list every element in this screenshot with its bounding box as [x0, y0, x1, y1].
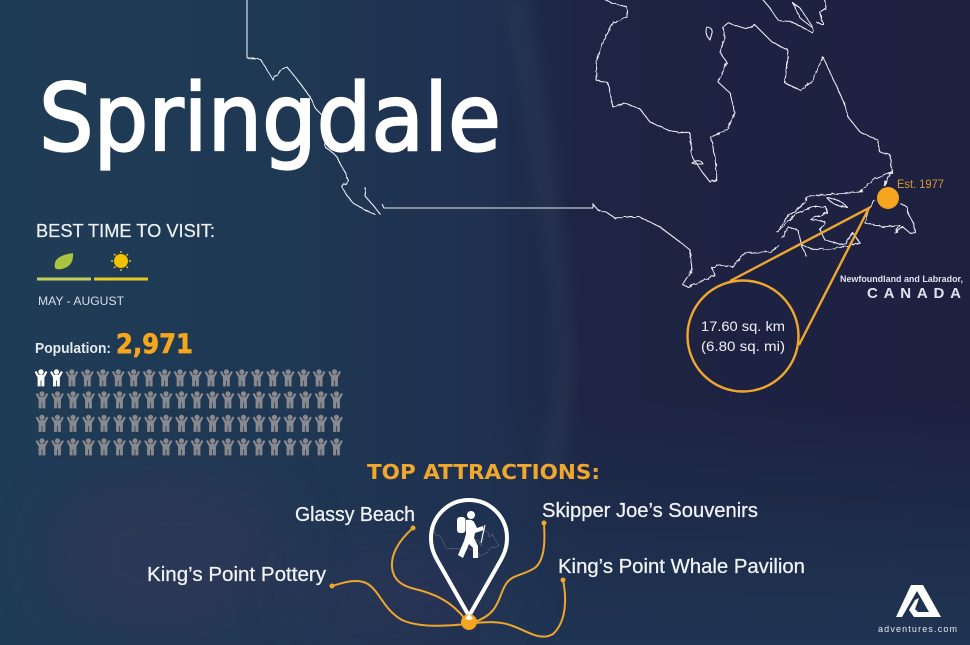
icon: sun: [111, 251, 131, 271]
logo: adventures.com: adventures.com: [878, 624, 957, 634]
attraction labels: [147, 500, 805, 586]
attraction labels: Glassy Beach: [295, 504, 415, 526]
top attractions heading: TOP ATTRACTIONS:: [367, 460, 600, 484]
region label: CANADA: [867, 285, 961, 302]
northern island: [706, 27, 712, 40]
attraction labels: Skipper Joe’s Souvenirs: [542, 500, 758, 522]
pin outline: [431, 500, 507, 616]
established label: Est. 1977: [897, 179, 944, 191]
area text: [701, 318, 785, 354]
months: MAY - AUGUST: [38, 294, 125, 308]
map of Canada: [247, 0, 915, 287]
heading: BEST TIME TO VISIT:: [36, 221, 215, 241]
pin tip over node: [465, 613, 473, 620]
area text: (6.80 sq. mi): [701, 338, 785, 354]
pin faint map: [435, 528, 499, 556]
coastlines: [247, 0, 915, 287]
best time to visit: [36, 221, 215, 308]
spring bar: [37, 278, 91, 280]
logo: adventures.com: [878, 585, 957, 634]
west boundary: [246, 0, 248, 58]
icon: leaf: [55, 253, 73, 269]
James Bay island: [692, 161, 703, 164]
pin base node: [461, 614, 477, 630]
region label: Newfoundland and Labrador,: [840, 274, 963, 285]
connector end dots: [330, 520, 566, 588]
pictogram: population: [35, 369, 343, 455]
population: [35, 329, 193, 360]
title: Springdale: [39, 64, 501, 172]
population number: 2,971: [116, 329, 193, 360]
area text: 17.60 sq. km: [701, 318, 785, 334]
attraction connector lines: [332, 523, 565, 637]
region label: [840, 274, 963, 302]
callout: area circle with pointer: [688, 208, 869, 392]
attraction labels: King’s Point Pottery: [147, 564, 326, 586]
population label: Population:: [35, 340, 111, 357]
summer bar: [94, 278, 148, 280]
location marker: [877, 187, 899, 209]
attraction labels: King’s Point Whale Pavilion: [558, 556, 805, 578]
map pin with hiker: [431, 500, 507, 616]
US border: [382, 204, 593, 208]
hiker: [457, 511, 485, 558]
